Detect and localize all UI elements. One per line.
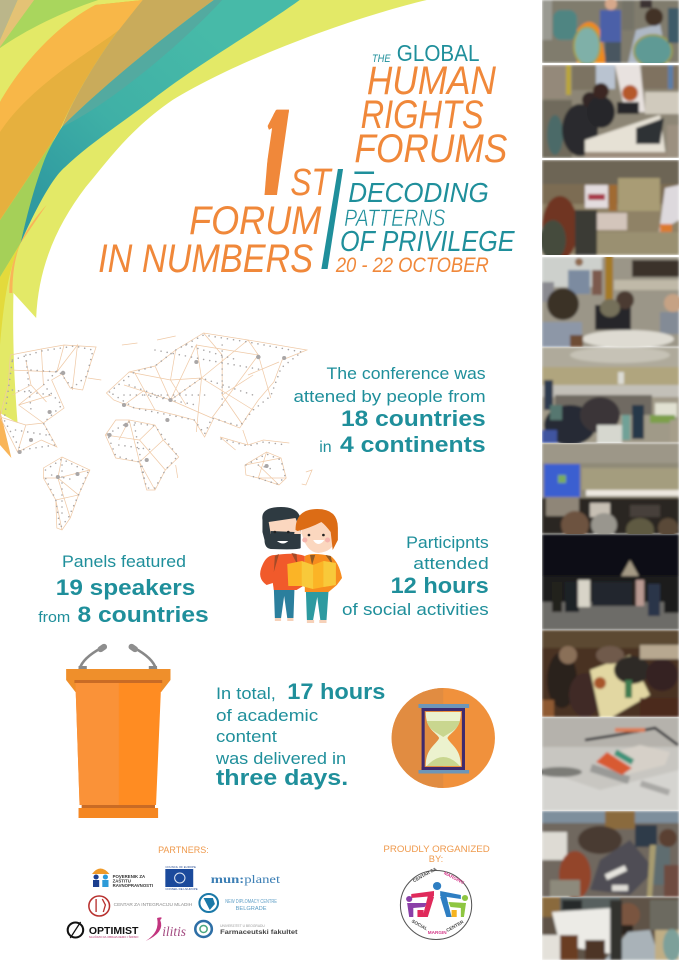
title: The Global Human Rights Forums: RIGHTS [361,92,484,137]
logo: Bilitis [146,917,186,941]
logo: Optimist: OPTIMIST [89,926,139,937]
stat: academic hours: In total, [216,684,276,703]
logo: Faculty of Pharmacy: UNIVERZITET U BEOGRADU [220,924,265,928]
folded map [287,561,336,589]
stat: academic hours: content [216,727,277,746]
stat: social hours: attended [413,554,489,573]
title: The Global Human Rights Forums [354,40,507,171]
photo: delegates at tables [542,255,679,348]
logo: Social Margin Center: MARGINU [443,871,466,885]
title: The Global Human Rights Forums: GLOBAL [397,40,479,66]
stat: academic hours: was delivered in [215,749,346,768]
decorative colored swooshes [0,0,427,458]
stat: speakers: Panels featured [62,552,186,571]
logo: equality commissioner: ZAŠTITU [113,879,131,883]
stat: academic hours: three days. [216,764,348,790]
stat: countries and continents: The conference was [327,364,486,383]
photo: programme papers and lanyards [538,717,679,811]
subtitle: Decoding Patterns of Privilege: DECODING [348,177,489,209]
stat: speakers [38,552,209,627]
heading: partners: PARTNERS: [158,845,209,856]
logo: Faculty of Pharmacy: Farmaceutski fakultet [220,929,299,936]
stat: countries and continents: in [319,438,332,456]
stat: social hours: of social activities [342,600,489,619]
icon: podium with microphones [66,643,170,818]
stat: countries and continents [293,364,486,457]
stat: speakers: from [38,609,70,626]
logo: New Diplomacy Centre [199,894,277,912]
bearded man [260,507,305,621]
heading: proudly organized by: BY: [429,854,443,865]
logo: equality commissioner [92,868,153,888]
title: The Global Human Rights Forums: HUMAN [367,58,497,103]
photo: room with projection screen [542,443,679,542]
icon: two travellers with map [260,507,342,623]
teal divider slash [321,169,343,269]
logo: Council of Europe: COUNCIL OF EUROPE [165,865,196,869]
heading: 1st Forum in Numbers: ST [290,162,333,204]
logo: New Diplomacy Centre: BELGRADE [236,906,267,912]
photo: full conference hall [542,347,679,445]
logo: equality commissioner: RAVNOPRAVNOSTI [113,883,153,888]
heading: proudly organized by [383,844,490,865]
logo: Social Margin Center: MARGIN [428,930,447,935]
logo: Optimist [68,922,139,939]
heading: 1st Forum in Numbers: IN NUMBERS [98,236,313,281]
logo: Social Margin Center [400,866,472,940]
event dates: 20 - 22 OCTOBER [335,253,489,277]
title: The Global Human Rights Forums: FORUMS [354,126,507,171]
stat: academic hours: 17 hours [287,678,385,704]
photo: conference room with screen [540,160,679,260]
logo: Bilitis: ilitis [162,924,186,940]
heading: 1st Forum in Numbers: 1 [231,85,321,221]
photo: seated audience [542,0,679,67]
photo: dinner table [542,630,679,717]
photo: participant at desk [542,897,679,960]
logo: youth integration centre: CENTAR ZA INTEGRACIJU MLADIH [114,902,192,907]
photo: audience taking notes [542,811,679,899]
photo: group at night [542,534,679,630]
main content column [0,0,515,941]
logo: Social Margin Center: SOCIAL [411,919,429,931]
world network map [0,333,312,530]
logo: Council of Europe: CONSEIL DE L'EUROPE [165,887,198,891]
heading: proudly organized by: PROUDLY ORGANIZED [383,844,490,855]
heading: 1st Forum in Numbers [100,110,332,272]
subtitle: Decoding Patterns of Privilege [340,177,515,258]
logo: Social Margin Center: CENTER [445,919,465,933]
icon: hourglass [392,688,495,788]
stat: countries and continents: 4 continents [340,431,486,457]
stat: social hours: 12 hours [391,572,489,598]
photo: panel table [542,65,679,158]
logo: equality commissioner: POVERENIK ZA [113,874,145,879]
stat: speakers: 19 speakers [56,574,195,600]
stat: academic hours: of academic [216,706,318,725]
photo strip [538,0,679,960]
subtitle: Decoding Patterns of Privilege: OF PRIVILEGE [340,225,515,258]
logo: youth integration centre [89,896,192,916]
logo: Optimist: NAUČIMO DA OBRAZUJEMO I ŠIRIMO [89,936,138,939]
title dash [354,172,374,174]
title: The Global Human Rights Forums: THE [372,53,391,65]
logo: New Diplomacy Centre: NEW DIPLOMACY CENTRE [225,899,277,905]
heading: 1st Forum in Numbers: FORUM [189,198,321,243]
logo: MUN Planet: mun: planet [211,872,281,886]
stat: social hours: Participnts [406,533,489,552]
subtitle: Decoding Patterns of Privilege: PATTERNS [344,205,445,232]
logo: Faculty of Pharmacy [195,921,299,937]
stat: academic hours [215,678,385,790]
stat: countries and continents: attened by people from [293,387,486,406]
stat: social hours [342,533,489,619]
partner logos [68,865,299,941]
redhead man [296,509,342,623]
logo: Social Margin Center: CENTAR ZA [412,866,438,883]
stat: countries and continents: 18 countries [341,405,486,431]
logo: Council of Europe [165,865,198,891]
stat: speakers: 8 countries [77,601,209,627]
